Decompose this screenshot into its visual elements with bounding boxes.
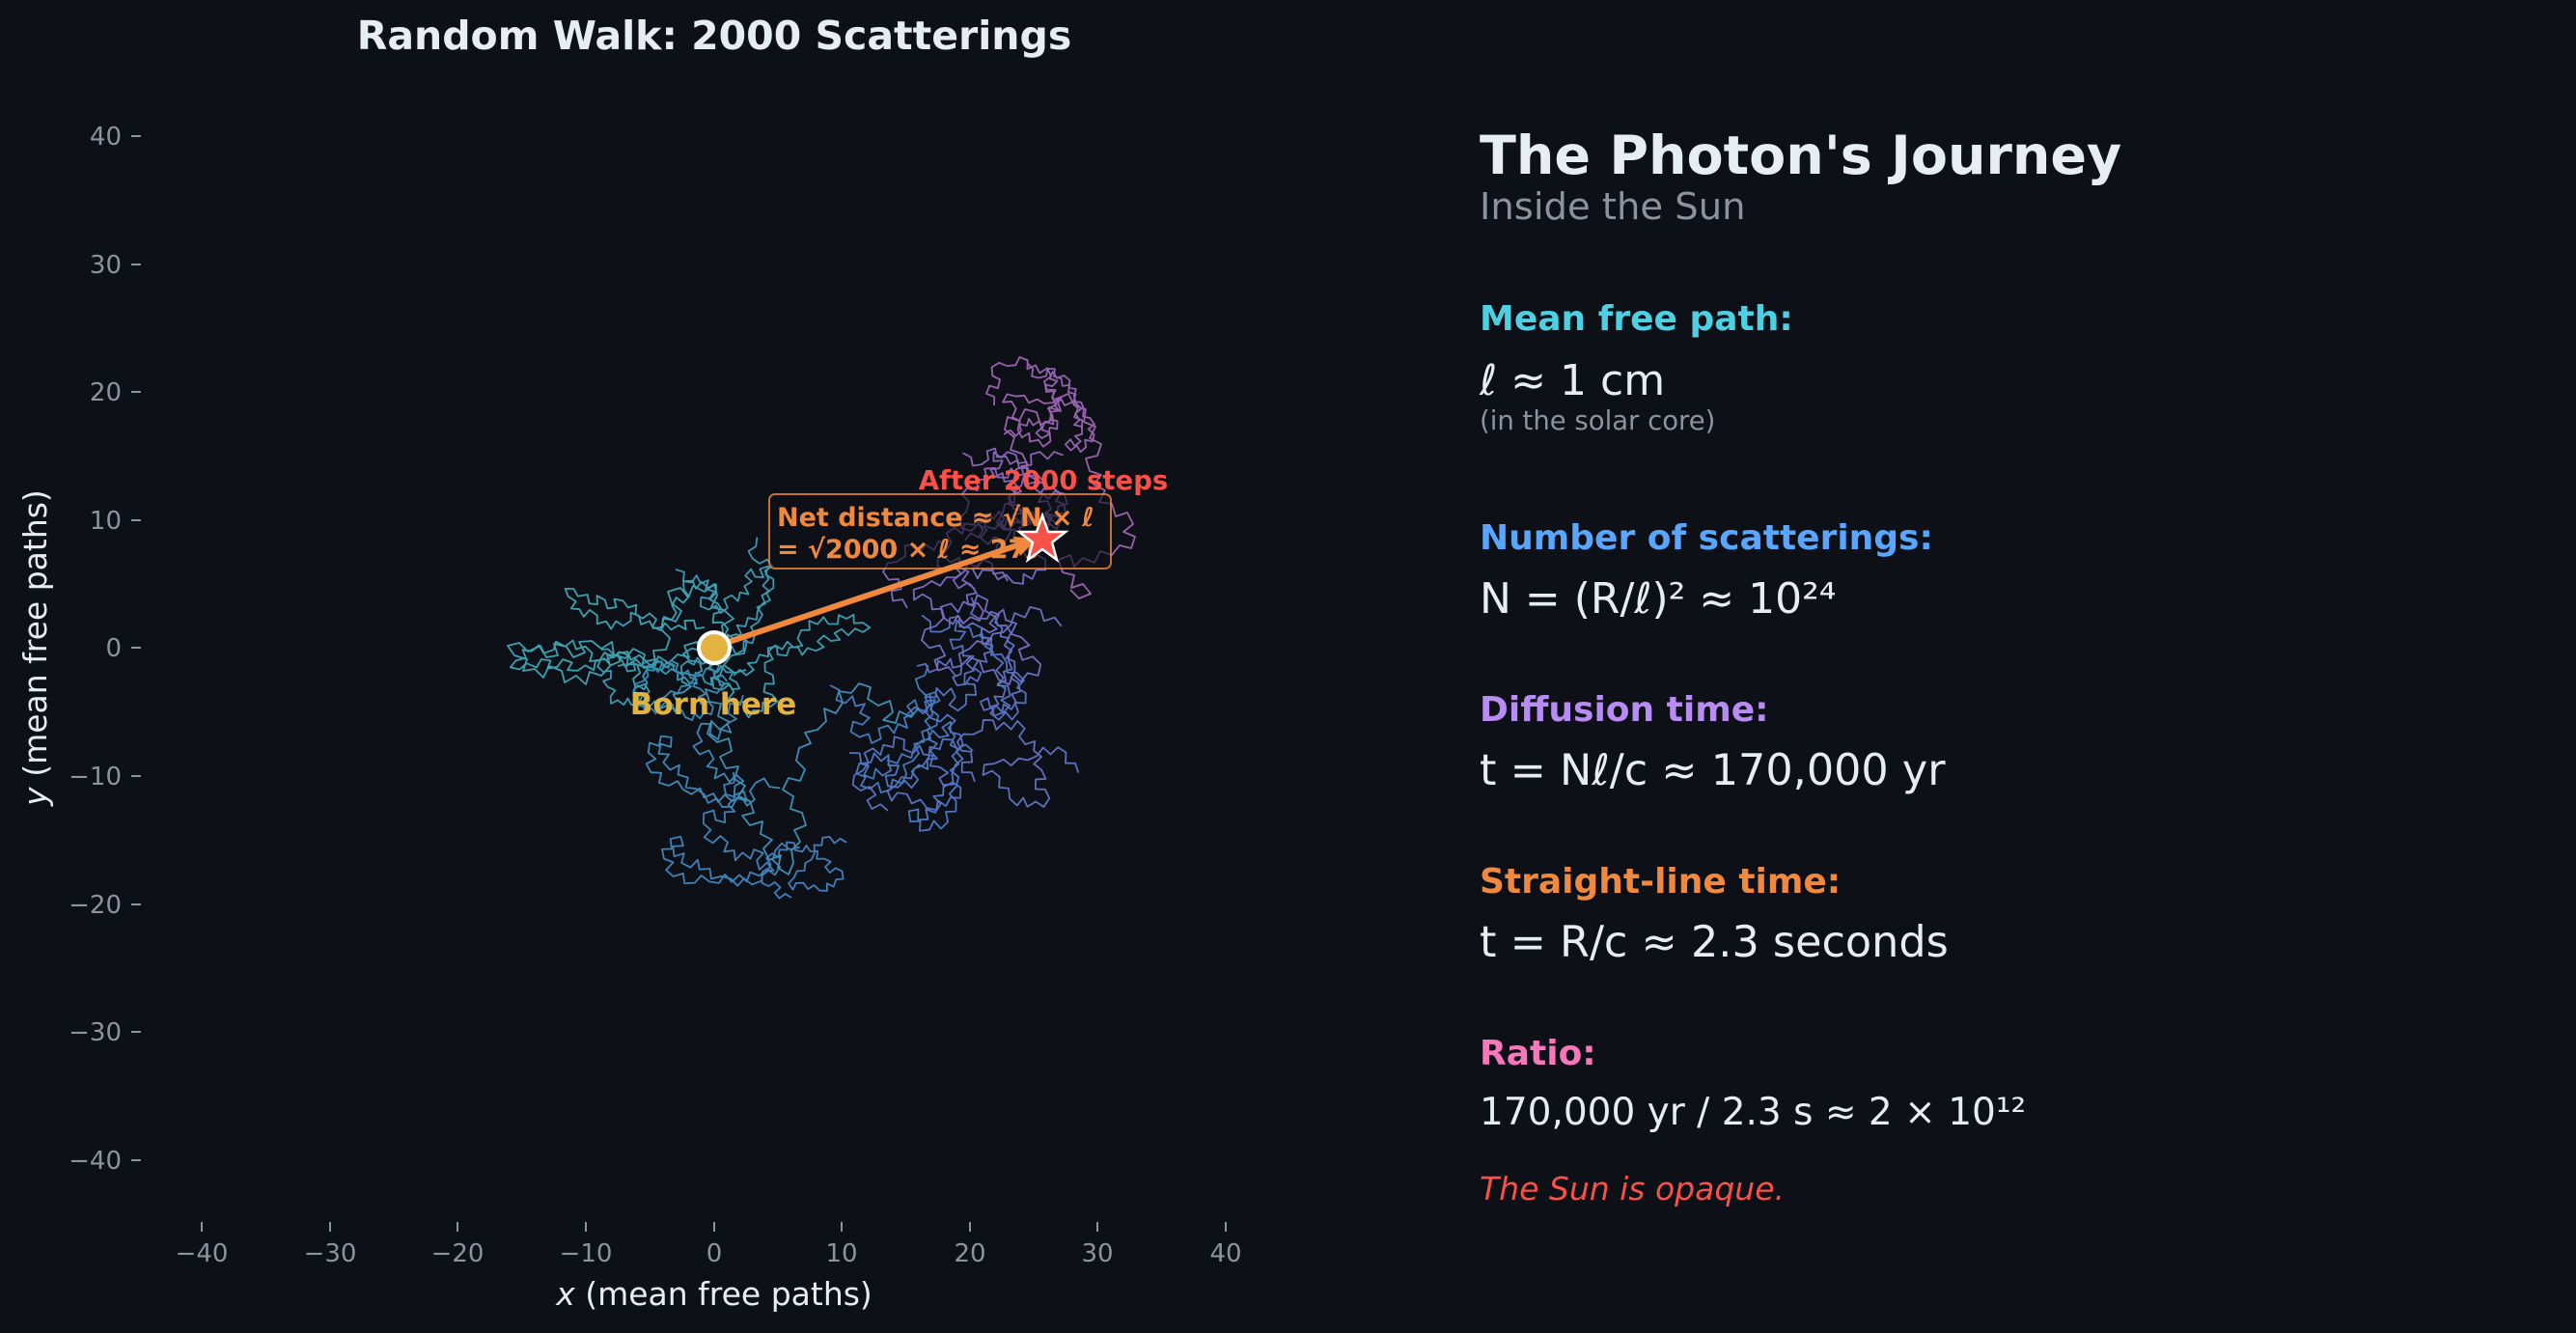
y axis ticks: 30 [90, 251, 122, 280]
x axis ticks: −30 [304, 1239, 356, 1268]
ratio: 170,000 yr / 2.3 s ≈ 2 × 10¹² [1480, 1091, 2026, 1134]
ratio: Ratio: [1480, 1034, 1596, 1073]
mean free path: ℓ ≈ 1 cm [1479, 356, 1665, 405]
annotation box: net distance: Net distance ≈ √N × ℓ [777, 503, 1094, 533]
y axis ticks: −40 [69, 1147, 122, 1176]
random walk path [508, 341, 1135, 921]
annotation box: net distance [769, 494, 1111, 569]
info panel [1479, 125, 2121, 1208]
y axis ticks: −30 [69, 1018, 122, 1047]
annotation box: net distance: = √2000 × ℓ ≈ 27ℓ [777, 535, 1039, 565]
x axis ticks: −40 [176, 1239, 228, 1268]
x axis ticks: 40 [1209, 1239, 1242, 1268]
mean free path: (in the solar core) [1480, 405, 1715, 436]
mean free path [1479, 299, 1793, 436]
chart title: Random Walk: 2000 Scatterings [357, 13, 1071, 59]
x axis ticks [176, 1222, 1242, 1268]
conclusion: The Sun is opaque. [1480, 1170, 1785, 1208]
y axis ticks: 0 [105, 634, 122, 663]
x axis ticks: 20 [954, 1239, 986, 1268]
number of scatterings [1480, 518, 1933, 624]
icon: end star [1019, 515, 1066, 560]
subtitle: Inside the Sun [1480, 185, 1746, 229]
straight-line time: t = R/c ≈ 2.3 seconds [1480, 918, 1949, 967]
diffusion time [1480, 690, 1946, 795]
straight-line time: Straight-line time: [1480, 862, 1841, 902]
x axis ticks: 0 [706, 1239, 722, 1268]
x axis ticks: −10 [560, 1239, 612, 1268]
x axis ticks: 10 [825, 1239, 858, 1268]
panel title: The Photon's Journey [1480, 125, 2121, 187]
straight-line time [1480, 862, 1949, 967]
x axis label: x (mean free paths) [555, 1275, 873, 1313]
y axis ticks: −10 [69, 763, 122, 791]
x axis ticks: 30 [1081, 1239, 1114, 1268]
mean free path: Mean free path: [1480, 299, 1793, 339]
y axis ticks: 20 [90, 378, 122, 407]
y axis ticks [69, 123, 141, 1176]
y axis label: y (mean free paths) [16, 489, 54, 807]
diffusion time: t = Nℓ/c ≈ 170,000 yr [1480, 746, 1946, 795]
label: after 2000 steps: After 2000 steps [919, 465, 1168, 496]
label: born here: Born here [630, 687, 796, 722]
number of scatterings: N = (R/ℓ)² ≈ 10²⁴ [1480, 574, 1836, 624]
x axis ticks: −20 [431, 1239, 484, 1268]
y axis ticks: 40 [90, 123, 122, 152]
ratio [1480, 1034, 2026, 1134]
y axis ticks: −20 [69, 891, 122, 920]
icon: start dot [699, 632, 730, 663]
arrow: net displacement [726, 537, 1037, 643]
diffusion time: Diffusion time: [1480, 690, 1769, 730]
y axis ticks: 10 [90, 507, 122, 536]
number of scatterings: Number of scatterings: [1480, 518, 1933, 558]
